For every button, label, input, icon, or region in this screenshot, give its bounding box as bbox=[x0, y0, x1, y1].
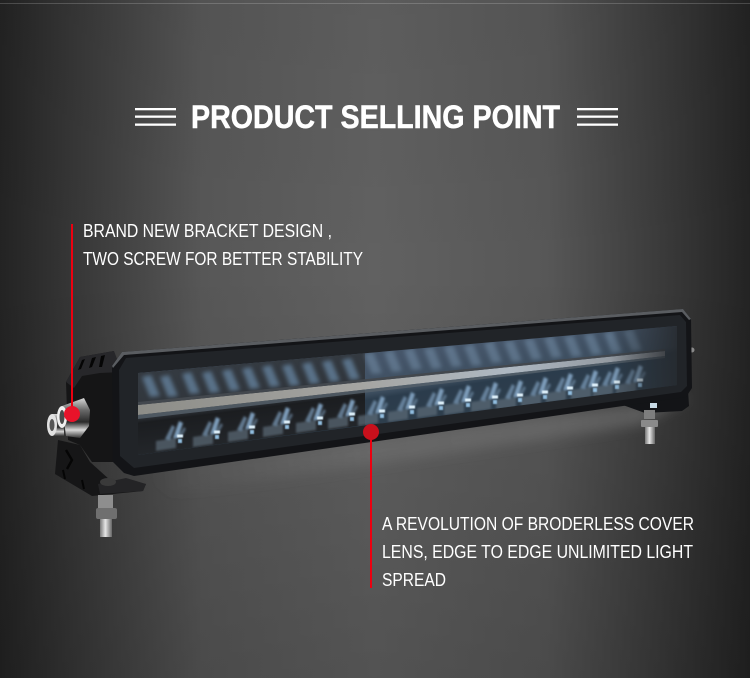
callout text: LENS, EDGE TO EDGE UNLIMITED LIGHT bbox=[382, 542, 693, 562]
callout: borderless lens bbox=[363, 424, 694, 590]
title left lines bbox=[135, 108, 176, 126]
callout text bbox=[83, 221, 363, 269]
lower LED reflectors and feathers bbox=[156, 365, 646, 451]
callout text: A REVOLUTION OF BRODERLESS COVER bbox=[382, 514, 694, 534]
reflection under light bar bbox=[130, 398, 690, 495]
callout text: TWO SCREW FOR BETTER STABILITY bbox=[83, 249, 363, 269]
callout text: SPREAD bbox=[382, 570, 446, 590]
callout line and dot bbox=[64, 224, 80, 422]
callout line and dot bbox=[363, 424, 379, 588]
LED light bar product bbox=[47, 309, 694, 537]
right bracket and stud bbox=[620, 348, 694, 444]
title bbox=[135, 99, 618, 135]
callout text: BRAND NEW BRACKET DESIGN , bbox=[83, 221, 332, 241]
bracket chrome bolts bbox=[47, 398, 90, 438]
callout text bbox=[382, 514, 694, 590]
LED chips bbox=[177, 378, 643, 443]
title text: PRODUCT SELLING POINT bbox=[191, 99, 560, 135]
housing bbox=[112, 309, 692, 476]
lens left darker half bbox=[138, 353, 365, 455]
lens bbox=[138, 320, 680, 455]
mounting stud left bbox=[96, 495, 117, 537]
light tube bbox=[138, 351, 665, 415]
lens right edge fade bbox=[614, 326, 677, 392]
left bracket bbox=[55, 351, 146, 496]
upper reflected streaks bbox=[142, 358, 360, 397]
title right lines bbox=[577, 108, 618, 126]
callout: bracket design bbox=[64, 221, 363, 422]
